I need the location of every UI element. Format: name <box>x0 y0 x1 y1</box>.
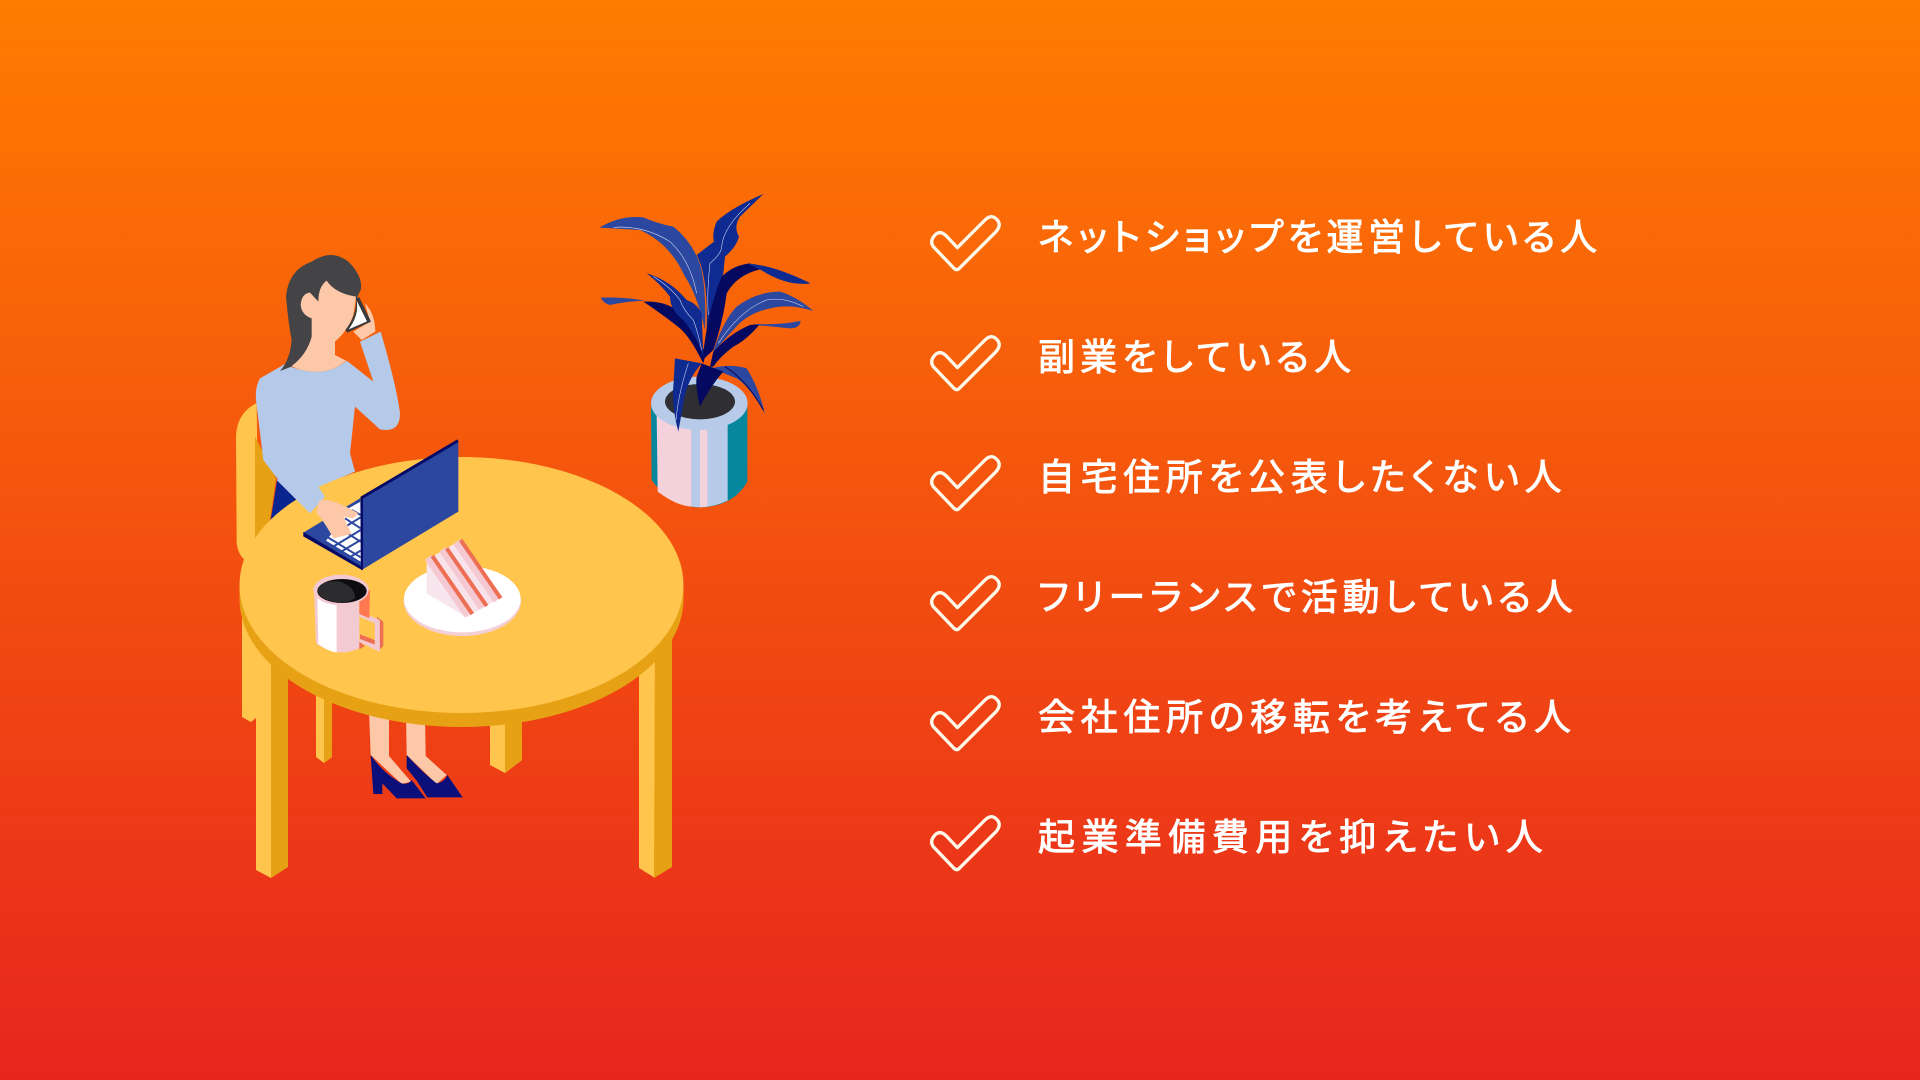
table back legs <box>316 690 522 773</box>
hair <box>280 255 361 371</box>
hand holding phone <box>353 303 375 340</box>
woman head <box>280 255 375 372</box>
list item 3: 自宅住所を公表したくない人 <box>1038 457 1567 498</box>
mug and sandwich <box>313 540 521 653</box>
check icons <box>932 217 999 870</box>
plant pot <box>651 377 748 507</box>
mug rim <box>313 575 369 605</box>
laptop screen <box>361 442 458 569</box>
woman torso: trousers and sweater <box>256 332 400 520</box>
laptop base <box>303 498 363 570</box>
table top <box>240 457 684 727</box>
illustration: woman at table <box>236 194 813 878</box>
legs and shoes <box>369 710 463 798</box>
check 3 <box>932 457 999 510</box>
plate <box>404 566 521 636</box>
sandwich <box>427 540 503 617</box>
list item 2: 副業をしている人 <box>1038 337 1356 378</box>
mug body <box>314 588 370 653</box>
list item 1: ネットショップを運営している人 <box>1038 217 1602 258</box>
check 1 <box>932 217 999 270</box>
check 4 <box>932 577 999 630</box>
hand <box>316 500 358 538</box>
mug handle <box>359 614 383 651</box>
list item 5: 会社住所の移転を考えてる人 <box>1038 697 1577 738</box>
laptop and arm <box>277 439 459 570</box>
forearm <box>277 460 325 513</box>
list item 6: 起業準備費用を抑えたい人 <box>1038 817 1549 858</box>
plant leaves <box>599 194 813 432</box>
chair <box>236 403 276 722</box>
check 6 <box>932 817 999 870</box>
check 2 <box>932 337 999 390</box>
table front legs <box>256 600 672 878</box>
list item 4: フリーランスで活動している人 <box>1038 577 1578 618</box>
check 5 <box>932 697 999 750</box>
coffee <box>317 579 367 603</box>
phone <box>345 297 371 333</box>
keyboard <box>326 502 361 562</box>
face and neck <box>292 281 356 372</box>
